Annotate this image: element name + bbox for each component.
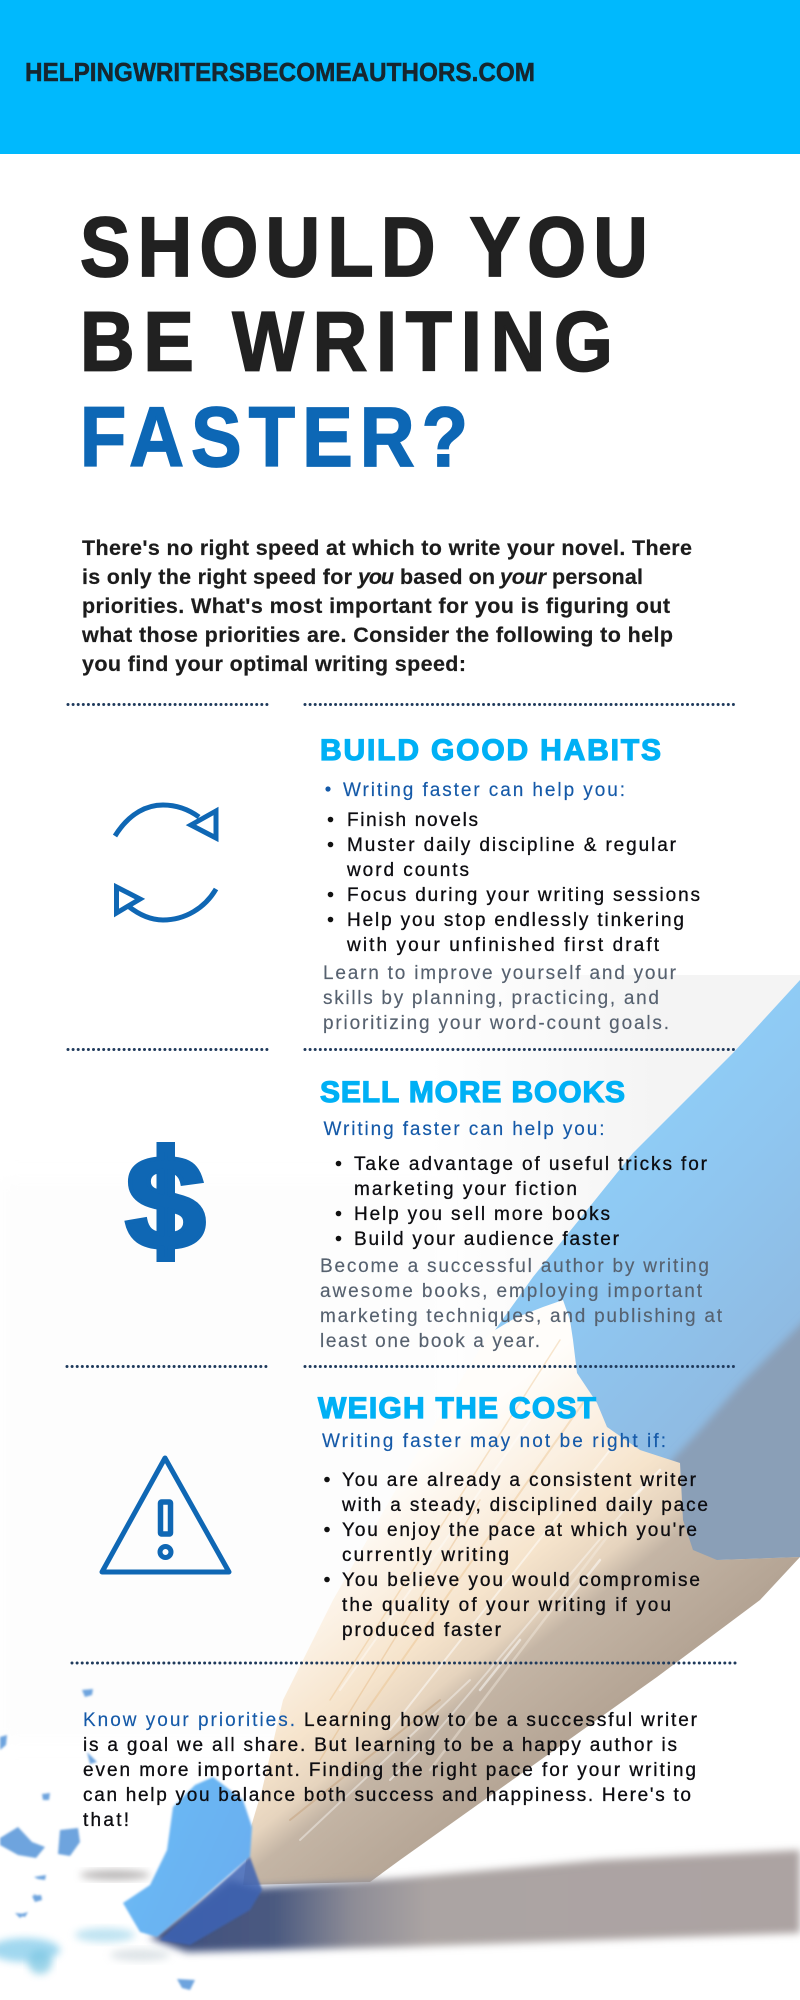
heading: WEIGH THE COST	[318, 1392, 596, 1425]
intro paragraph: priorities. What's most important for you is figuring out	[82, 594, 670, 618]
bullet list: currently writing	[342, 1545, 509, 1566]
bullet list: Help you sell more books	[354, 1204, 610, 1225]
intro paragraph: your	[499, 565, 548, 589]
panel: sell more books	[320, 1076, 723, 1352]
pencil lead tip	[123, 1777, 252, 1937]
closing paragraph: even more important. Finding the right pace for your writing	[83, 1760, 696, 1781]
bullet list: marketing your fiction	[354, 1179, 577, 1200]
bullet list: produced faster	[342, 1620, 502, 1641]
bullet list: You are already a consistent writer	[342, 1470, 697, 1491]
closing paragraph: can help you balance both success and happiness. Here's to	[83, 1785, 691, 1806]
bullet list	[336, 1154, 708, 1250]
website name: HELPINGWRITERSBECOMEAUTHORS.COM	[25, 57, 535, 87]
closing paragraph	[83, 1710, 698, 1831]
intro paragraph: you	[357, 565, 394, 589]
subheading: Writing faster can help you:	[343, 780, 625, 801]
bullet list	[324, 1470, 708, 1641]
title	[80, 200, 648, 484]
bullet list: Muster daily discipline & regular	[347, 835, 677, 856]
paint chips and dust	[0, 1689, 195, 1990]
takeaway text: prioritizing your word-count goals.	[323, 1013, 669, 1034]
panel: build good habits	[320, 734, 700, 1034]
takeaway text: skills by planning, practicing, and	[323, 988, 659, 1009]
subheading: Writing faster may not be right if:	[322, 1431, 666, 1452]
pencil body shadow side	[670, 1315, 800, 1575]
takeaway text: Learn to improve yourself and your	[323, 963, 677, 984]
takeaway text: awesome books, employing important	[320, 1281, 703, 1302]
icon: dollar sign: $	[125, 1127, 206, 1278]
intro paragraph: is only the right speed for	[82, 565, 353, 589]
heading: SELL MORE BOOKS	[320, 1076, 625, 1109]
title: FASTER?	[80, 390, 468, 484]
bullet list: Help you stop endlessly tinkering	[347, 910, 684, 931]
takeaway text: marketing techniques, and publishing at	[320, 1306, 723, 1327]
panel: weigh the cost	[318, 1392, 708, 1641]
takeaway text	[320, 1256, 723, 1352]
bullet list: Take advantage of useful tricks for	[354, 1154, 708, 1175]
icon: warning triangle	[102, 1458, 229, 1572]
closing paragraph: that!	[83, 1810, 129, 1831]
intro paragraph: based on	[400, 565, 495, 589]
lead dark side	[160, 1857, 262, 1945]
wood grain	[290, 1340, 660, 1840]
header band	[0, 0, 800, 154]
bullet list: word counts	[346, 860, 469, 881]
bullet list: Focus during your writing sessions	[347, 885, 700, 906]
title: SHOULD YOU	[80, 200, 648, 294]
takeaway text	[323, 963, 677, 1034]
heading: BUILD GOOD HABITS	[320, 734, 661, 767]
bullet list: Finish novels	[347, 810, 478, 831]
bullet list: You believe you would compromise	[342, 1570, 700, 1591]
takeaway text: Become a successful author by writing	[320, 1256, 709, 1277]
bullet list: with your unfinished first draft	[346, 935, 660, 956]
subheading: Writing faster can help you:	[324, 1119, 604, 1140]
bullet list: Build your audience faster	[354, 1229, 620, 1250]
bullet list	[328, 810, 700, 956]
closing paragraph: is a goal we all share. But learning to be a happy author is	[83, 1735, 677, 1756]
pencil blue body	[470, 980, 800, 1600]
intro paragraph: There's no right speed at which to write your novel. There	[82, 536, 692, 560]
icon: cycle arrows	[115, 805, 216, 920]
bullet list: the quality of your writing if you	[342, 1595, 671, 1616]
floor shadow of pencil	[150, 1850, 800, 1952]
intro paragraph	[81, 536, 692, 676]
title: BE WRITING	[80, 295, 613, 388]
bullet list: You enjoy the pace at which you're	[342, 1520, 697, 1541]
closing paragraph: Know your priorities.	[83, 1710, 295, 1731]
takeaway text: least one book a year.	[320, 1331, 540, 1352]
intro paragraph: personal	[552, 565, 643, 589]
pencil wood	[243, 1300, 800, 1885]
closing paragraph: Learning how to be a successful writer	[304, 1710, 698, 1731]
bullet list: with a steady, disciplined daily pace	[341, 1495, 708, 1516]
background photo: broken blue pencil	[0, 975, 800, 1990]
intro paragraph: you find your optimal writing speed:	[82, 652, 466, 676]
intro paragraph: what those priorities are. Consider the following to help	[81, 623, 673, 647]
